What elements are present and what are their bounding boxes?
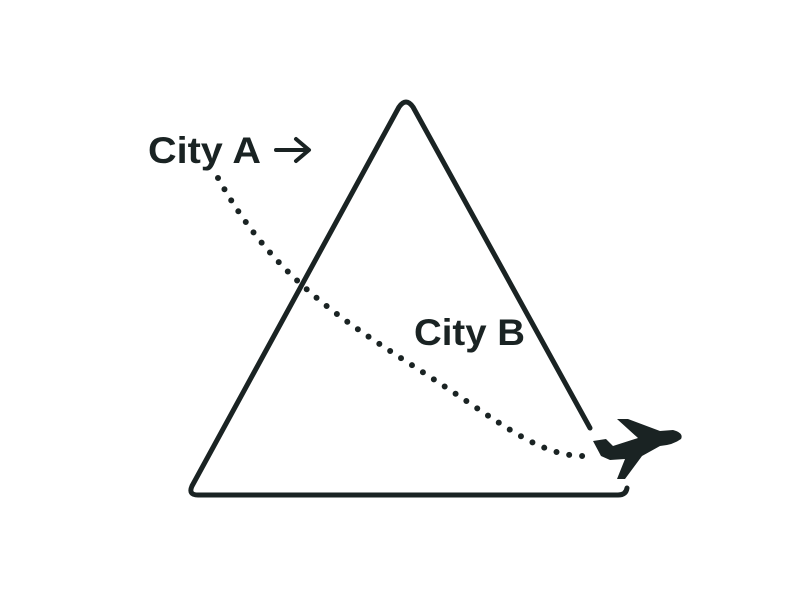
icon: airplane — [593, 419, 682, 479]
label: City A with arrow — [148, 130, 309, 171]
label: City A with arrow: City A — [148, 130, 261, 171]
label: City B: City B — [414, 312, 525, 353]
dotted flight path — [218, 178, 595, 456]
triangle outline — [191, 102, 627, 495]
